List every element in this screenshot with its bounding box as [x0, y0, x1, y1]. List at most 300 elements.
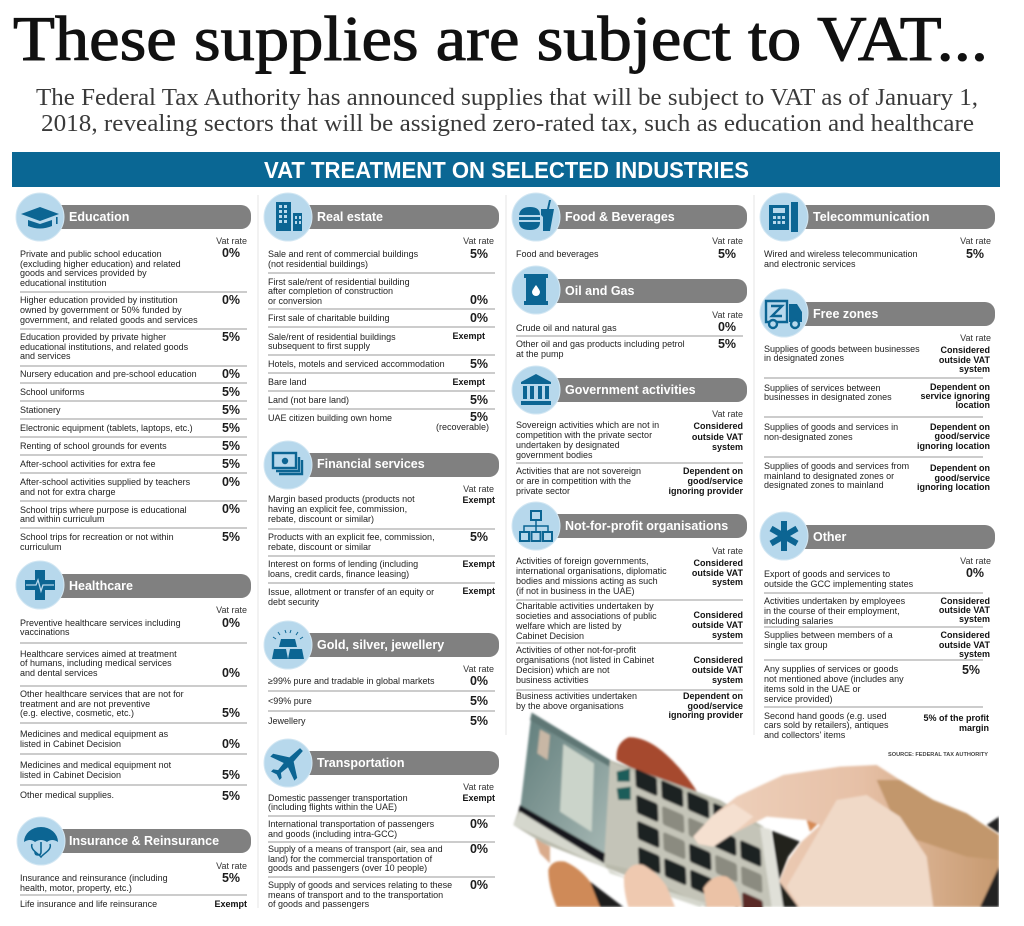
row: 0% [222, 502, 240, 516]
row [268, 494, 495, 524]
row: Exempt [462, 793, 495, 803]
row: Sale/rent of residential buildings [268, 332, 396, 342]
row: outside VAT [692, 665, 743, 675]
row: system [712, 630, 743, 640]
row: in the course of their employment, [764, 606, 900, 616]
row: organisations (not listed in Cabinet [516, 655, 655, 665]
heading: free zones: Free zones [813, 307, 878, 321]
row: Exempt [214, 899, 247, 909]
row [516, 691, 743, 720]
row [268, 247, 488, 269]
row: cars sold by retailers), antiques [764, 720, 889, 730]
row: health, motor, property, etc.) [20, 883, 132, 893]
row: Exempt [462, 495, 495, 505]
row: Renting of school grounds for events [20, 441, 167, 451]
row [764, 344, 990, 374]
panel: healthcare [16, 561, 251, 803]
row: not mentioned above (includes any [764, 674, 904, 684]
row [268, 357, 488, 371]
row: Charitable activities undertaken by [516, 601, 654, 611]
icon: medical cross [25, 570, 55, 600]
row: (excluding higher education) and related [20, 259, 181, 269]
subtitle: The Federal Tax Authority has announced supplies that will be subject to VAT as of January 1, [36, 84, 978, 111]
heading: food [512, 193, 747, 241]
calculator keys [635, 768, 764, 919]
heading: telecommunication: Telecommunication [813, 210, 929, 224]
row: 5% [222, 871, 240, 885]
row: outside VAT [692, 568, 743, 578]
row: Activities that are not sovereign [516, 466, 641, 476]
row: Private and public school education [20, 249, 162, 259]
back finger [616, 737, 700, 797]
row: First sale of charitable building [268, 313, 390, 323]
icon: banknotes [273, 453, 302, 474]
row: Dependent on [930, 422, 990, 432]
row: bodies and missions acting as such [516, 576, 658, 586]
row: Other healthcare services that are not for [20, 689, 184, 699]
subtitle [36, 84, 978, 137]
row: government bodies [516, 450, 593, 460]
row: owned by government or 50% funded by [20, 305, 182, 315]
row: Second hand goods (e.g. used [764, 711, 887, 721]
row [516, 420, 743, 460]
row: ignoring provider [668, 710, 743, 720]
row [764, 382, 990, 410]
row: Issue, allotment or transfer of an equity or [268, 587, 434, 597]
row: 0% [470, 878, 488, 892]
row [20, 475, 240, 497]
row [20, 385, 240, 399]
row: goods and passengers (over 10 people) [268, 863, 427, 873]
heading: government [512, 366, 747, 414]
row: 5% [470, 247, 488, 261]
row: having an explicit fee, commission, [268, 504, 407, 514]
row [20, 330, 240, 361]
panel: telecommunication: Vat rate [960, 236, 991, 246]
row: including salaries [764, 616, 834, 626]
heading: real estate: Real estate [317, 210, 383, 224]
row: Other oil and gas products including petrol [516, 339, 685, 349]
row: (recoverable) [436, 422, 489, 432]
row [268, 377, 485, 387]
row: Supplies of goods and services in [764, 422, 898, 432]
row: outside VAT [939, 605, 990, 615]
icon: graduation cap [21, 207, 59, 228]
row: Crude oil and natural gas [516, 323, 617, 333]
row: After-school activities for extra fee [20, 459, 156, 469]
row: at the pump [516, 349, 564, 359]
row: good/service [934, 473, 990, 483]
row [515, 601, 743, 641]
row: 5% [470, 410, 488, 424]
row: business activities [516, 675, 589, 685]
row [20, 246, 240, 288]
heading: gold: Gold, silver, jewellery [317, 638, 444, 652]
row: 5% [470, 530, 488, 544]
row: Supply of a means of transport (air, sea and [268, 844, 443, 854]
row: single tax group [764, 640, 828, 650]
panel: real estate [264, 193, 499, 432]
row [268, 694, 488, 708]
row [516, 556, 743, 596]
row: and not for extra charge [20, 487, 116, 497]
row: system [712, 577, 743, 587]
row [268, 393, 488, 407]
row: 5% [718, 337, 736, 351]
row [268, 530, 488, 552]
row: 0% [718, 320, 736, 334]
icon: truck [766, 301, 802, 328]
row: margin [959, 723, 989, 733]
row: after completion of construction [268, 286, 393, 296]
icon: organisation chart [520, 511, 552, 541]
row: International transportation of passengers [268, 819, 435, 829]
row: and within curriculum [20, 514, 105, 524]
row: 5% [222, 706, 240, 720]
row: Wired and wireless telecommunication [764, 249, 918, 259]
panel: real estate: Vat rate [463, 236, 494, 246]
row: educational institution [20, 278, 107, 288]
row: Decision) which are not [516, 665, 610, 675]
row: Hotels, motels and serviced accommodation [268, 359, 445, 369]
row [20, 403, 240, 417]
row [268, 586, 495, 607]
panel: financial services [264, 441, 499, 607]
row [20, 689, 240, 720]
row: Higher education provided by institution [20, 295, 178, 305]
row: Any supplies of services or goods [764, 664, 899, 674]
panel: gold, silver, jewellery [264, 621, 499, 728]
row [268, 277, 488, 307]
row: government, and related goods and services [20, 315, 198, 325]
row: Sale and rent of commercial buildings [268, 249, 419, 259]
row: Jewellery [268, 716, 306, 726]
sleeve [980, 817, 999, 907]
row [764, 630, 990, 659]
heading: other [760, 512, 995, 560]
panel: not-for-profit organisations: Vat rate [712, 546, 743, 556]
heading: government: Government activities [565, 383, 696, 397]
row: Activities of foreign governments, [516, 556, 649, 566]
heading: education [16, 193, 251, 241]
calculator screen panel [520, 713, 610, 863]
row: Insurance and reinsurance (including [20, 873, 168, 883]
row: 0% [470, 674, 488, 688]
row [268, 311, 488, 325]
row: Activities undertaken by employees [764, 596, 906, 606]
row: rebate, discount or similar) [268, 514, 374, 524]
row: School trips for recreation or not within [20, 532, 174, 542]
panel: financial services: Vat rate [463, 484, 494, 494]
row: designated zones to mainland [764, 480, 884, 490]
row: Supply of goods and services relating to these [268, 880, 452, 890]
row: School uniforms [20, 387, 85, 397]
row: 0% [222, 666, 240, 680]
row: subsequent to first supply [268, 341, 371, 351]
row: vaccinations [20, 627, 70, 637]
row: 5% [222, 789, 240, 803]
icon: airplane [263, 738, 313, 788]
row: debt security [268, 597, 320, 607]
row: (including flights within the UAE) [268, 802, 397, 812]
icon: oil barrel [524, 274, 548, 305]
row: UAE citizen building own home [268, 413, 392, 423]
row: Considered [693, 558, 743, 568]
row: 0% [966, 566, 984, 580]
row: Exempt [462, 586, 495, 596]
row [268, 817, 488, 839]
row: 5% [222, 530, 240, 544]
row: 5% [966, 247, 984, 261]
row [268, 410, 489, 432]
row: undertaken by designated [516, 440, 620, 450]
row: 5% [222, 421, 240, 435]
heading: healthcare: Healthcare [69, 579, 133, 593]
panel: healthcare: Vat rate [216, 605, 247, 615]
row [20, 729, 240, 751]
row [268, 793, 495, 812]
row: <99% pure [268, 696, 312, 706]
row [20, 439, 240, 453]
right hand [693, 765, 999, 907]
icon: burger and drink [519, 200, 554, 231]
row: good/service [687, 476, 743, 486]
row: Considered [940, 345, 990, 355]
row: 0% [470, 311, 488, 325]
row [20, 899, 247, 909]
row [764, 247, 984, 269]
panel: other: Vat rate [960, 556, 991, 566]
row: Sovereign activities which are not in [516, 420, 659, 430]
heading: telecommunication [760, 193, 995, 241]
row [20, 457, 240, 471]
row [268, 714, 488, 728]
row: 5% [470, 393, 488, 407]
row: Export of goods and services to [764, 569, 890, 579]
row: 5% [222, 330, 240, 344]
row: outside VAT [692, 620, 743, 630]
row: 0% [470, 293, 488, 307]
row: curriculum [20, 542, 62, 552]
row: system [959, 364, 990, 374]
heading: other: Other [813, 530, 846, 544]
row: Supplies between members of a [764, 630, 893, 640]
row: in designated zones [764, 353, 845, 363]
calculator right edge [760, 827, 783, 907]
row: (not residential buildings) [268, 259, 368, 269]
panel: transportation: Vat rate [463, 782, 494, 792]
row: 5% [718, 247, 736, 261]
row: welfare which are listed by [515, 621, 622, 631]
row: Dependent on [683, 466, 743, 476]
row: of goods and passengers [268, 899, 370, 909]
row: Activities of other not-for-profit [516, 645, 637, 655]
row [516, 337, 736, 359]
row: international organisations, diplomatic [516, 566, 667, 576]
row [764, 596, 990, 626]
row: Medicines and medical equipment not [20, 760, 172, 770]
row: Considered [693, 610, 743, 620]
row: good/service [687, 701, 743, 711]
panel: food and beverages [512, 193, 747, 261]
row [20, 367, 240, 381]
row: 5% [962, 663, 980, 677]
heading: not-for-profit: Not-for-profit organisations [565, 519, 728, 533]
row: goods and services provided by [20, 268, 147, 278]
row: Electronic equipment (tablets, laptops, etc.) [20, 423, 193, 433]
heading: oil and gas [512, 266, 747, 314]
row: Exempt [452, 331, 485, 341]
heading: free zones [760, 289, 995, 337]
subtitle: 2018, revealing sectors that will be assigned zero-rated tax, such as education and healthcare [41, 110, 974, 137]
icon: umbrella [24, 827, 58, 857]
row: Food and beverages [516, 249, 599, 259]
heading: food: Food & Beverages [565, 210, 675, 224]
row: Nursery education and pre-school education [20, 369, 197, 379]
row: and electronic services [764, 259, 856, 269]
row: competition with the private sector [516, 430, 652, 440]
row: treatment and are not preventive [20, 699, 150, 709]
row [20, 649, 240, 680]
row: means of transport and to the transportation [268, 890, 443, 900]
row: Supplies of goods between businesses [764, 344, 920, 354]
heading: gold [264, 621, 499, 669]
row: Considered [693, 655, 743, 665]
row: 5% [222, 768, 240, 782]
row: educational institutions, and related goods [20, 342, 189, 352]
row: of humans, including medical services [20, 658, 172, 668]
panel: food and beverages: Vat rate [712, 236, 743, 246]
calculator body [514, 759, 764, 898]
row: listed in Cabinet Decision [20, 770, 121, 780]
heading: real estate [264, 193, 499, 241]
row: First sale/rent of residential building [268, 277, 410, 287]
row: outside VAT [939, 355, 990, 365]
row: societies and associations of public [516, 611, 657, 621]
row: 5% [470, 357, 488, 371]
row: and collectors' items [764, 730, 846, 740]
icon: government building [521, 374, 551, 405]
row: Bare land [268, 377, 307, 387]
row [268, 559, 495, 579]
row: items sold in the UAE or [764, 684, 861, 694]
row: After-school activities supplied by teachers [20, 477, 191, 487]
panel: free zones: Vat rate [960, 333, 991, 343]
row: or are in competition with the [516, 476, 631, 486]
left thumb and fingers [548, 861, 602, 907]
panel: education [16, 193, 251, 552]
row [516, 645, 743, 685]
row [20, 789, 240, 803]
row: Margin based products (products not [268, 494, 415, 504]
row [20, 293, 240, 325]
row: 0% [222, 475, 240, 489]
row: Stationery [20, 405, 61, 415]
banner heading: VAT TREATMENT ON SELECTED INDUSTRIES [264, 157, 749, 183]
row: ignoring location [917, 441, 990, 451]
row: 5% of the profit [924, 713, 989, 723]
row: 0% [222, 293, 240, 307]
row: 5% [222, 457, 240, 471]
row [764, 422, 990, 451]
row: good/service [934, 431, 990, 441]
row: Business activities undertaken [516, 691, 637, 701]
heading: insurance [17, 817, 251, 865]
heading: transportation: Transportation [317, 756, 405, 770]
banner heading [12, 152, 1000, 187]
row: Medicines and medical equipment as [20, 729, 169, 739]
row: 0% [222, 246, 240, 260]
row: 5% [470, 714, 488, 728]
row: 5% [222, 385, 240, 399]
row: 0% [470, 842, 488, 856]
row [20, 530, 240, 552]
row: ignoring location [917, 482, 990, 492]
row: Considered [940, 630, 990, 640]
row: or conversion [268, 296, 322, 306]
row: and services [20, 351, 71, 361]
heading: healthcare [16, 561, 251, 609]
row [268, 842, 488, 873]
row: Healthcare services aimed at treatment [20, 649, 177, 659]
row [764, 663, 980, 704]
row [516, 320, 736, 334]
row: Cabinet Decision [516, 631, 584, 641]
heading: not-for-profit [512, 502, 747, 550]
row [20, 871, 240, 893]
row: outside VAT [692, 432, 743, 442]
panel: free zones [760, 289, 995, 492]
row: system [712, 675, 743, 685]
row: 5% [222, 439, 240, 453]
row [764, 566, 984, 589]
row: by the above organisations [516, 701, 624, 711]
row: outside the GCC implementing states [764, 579, 914, 589]
source note: SOURCE: FEDERAL TAX AUTHORITY [888, 752, 988, 758]
panel: oil and gas: Vat rate [712, 310, 743, 320]
row: businesses in designated zones [764, 392, 892, 402]
row: Other medical supplies. [20, 790, 114, 800]
row: mainland to designated zones or [764, 471, 894, 481]
row: Dependent on [683, 691, 743, 701]
row: rebate, discount or similar [268, 542, 371, 552]
row: 5% [470, 694, 488, 708]
heading: transportation [264, 739, 499, 787]
row: (e.g. elective, cosmetic, etc.) [20, 708, 134, 718]
panel: telecommunication [760, 193, 995, 269]
illustration: hands using a calculator [513, 713, 999, 919]
row: and dental services [20, 668, 98, 678]
row [516, 466, 743, 496]
icon: gold bars [272, 630, 304, 659]
row: (if not in business in the UAE) [516, 586, 635, 596]
row: Dependent on [930, 463, 990, 473]
icon: buildings [276, 202, 302, 231]
row [268, 878, 488, 909]
row: outside VAT [939, 640, 990, 650]
row: Dependent on [930, 382, 990, 392]
row: system [712, 442, 743, 452]
row [20, 502, 240, 524]
icon: telephone [769, 202, 798, 232]
row: Land (not bare land) [268, 395, 349, 405]
panel: oil and gas [512, 266, 747, 359]
row [20, 421, 240, 435]
row: loans, credit cards, finance leasing) [268, 569, 409, 579]
panel: other [760, 512, 995, 740]
row [764, 461, 990, 492]
heading: financial services: Financial services [317, 457, 425, 471]
